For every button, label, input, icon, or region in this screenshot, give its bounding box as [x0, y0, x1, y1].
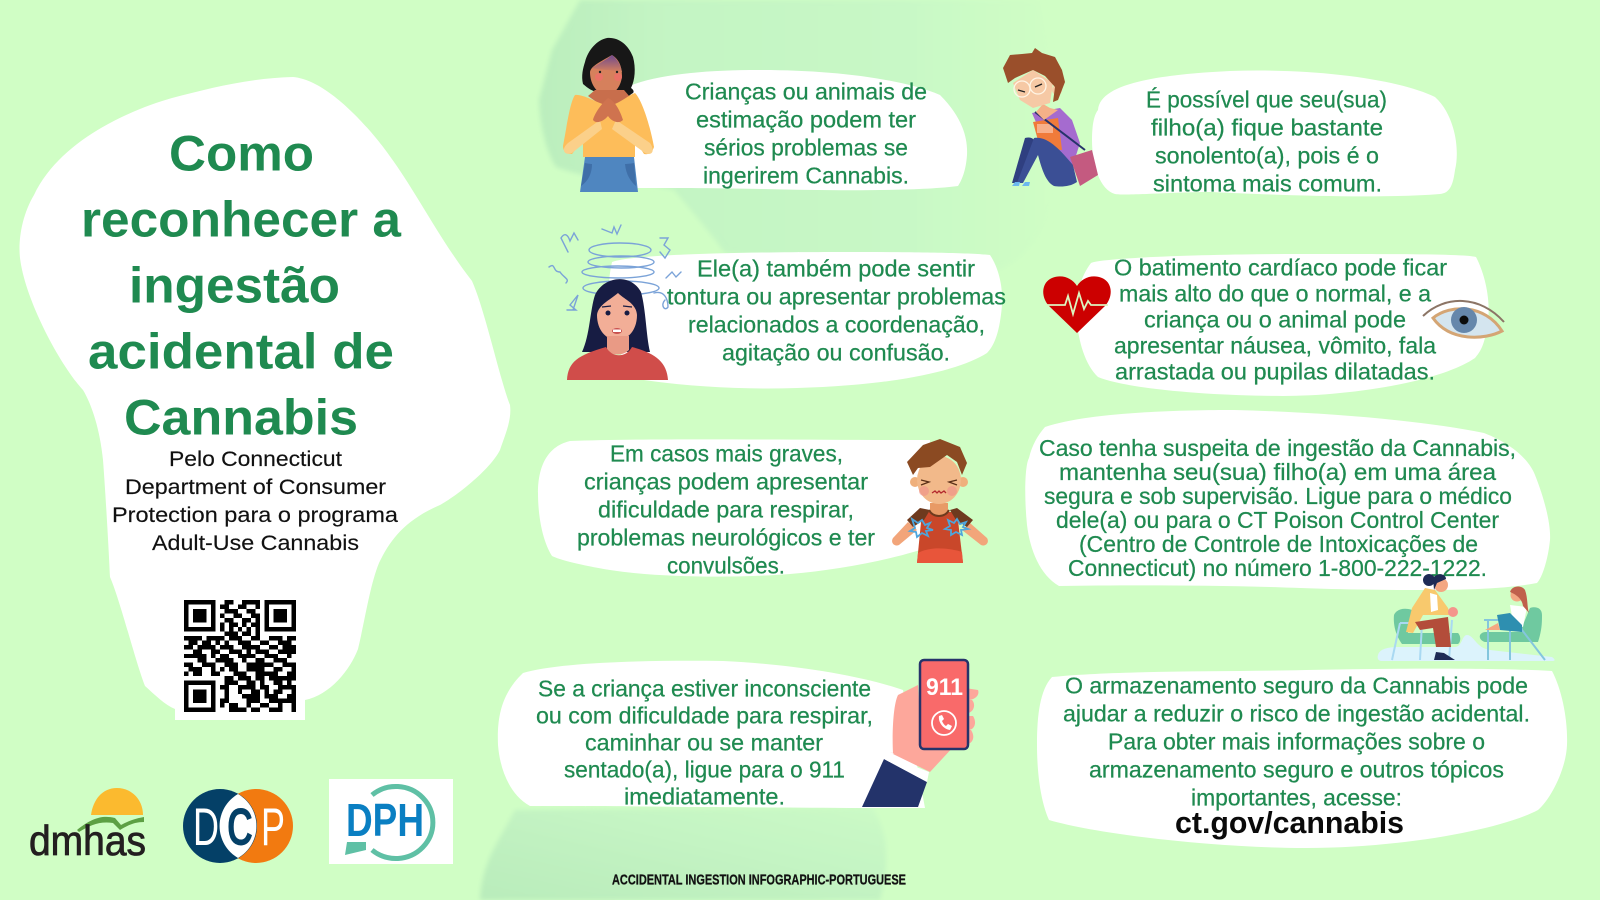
text: filho(a) fique bastante: [1151, 114, 1383, 140]
text: sérios problemas se: [704, 134, 908, 160]
text: importantes, acesse:: [1191, 784, 1402, 810]
panel: pets and children warning: [563, 38, 967, 192]
text: [1039, 435, 1516, 581]
icon: dizzy woman: [549, 225, 681, 380]
subtitle: Department of Consumer: [125, 476, 386, 499]
logo: DCP: C: [227, 798, 253, 857]
icon: hand holding phone: [862, 660, 978, 807]
icon: heart with pulse: [1043, 276, 1111, 333]
text: Em casos mais graves,: [610, 440, 843, 466]
logo: DPH: [329, 779, 453, 864]
text: ou com dificuldade para respirar,: [536, 702, 873, 728]
text: convulsões.: [667, 552, 785, 578]
bubble: [1037, 669, 1567, 848]
panel: title blob: [20, 77, 510, 720]
text: Connecticut) no número 1-800-222-1222.: [1068, 555, 1487, 581]
watercolor wash: [480, 0, 1060, 900]
icon: hand holding phone: 911: [926, 674, 963, 701]
panel: heart rate and symptoms: [1043, 254, 1504, 396]
logo: dmhas: dmhas: [29, 817, 146, 864]
text: sonolento(a), pois é o: [1155, 142, 1379, 168]
logo: DPH: DPH: [346, 794, 424, 846]
text: [1063, 672, 1530, 810]
swirl lines: [549, 225, 681, 310]
text: Ele(a) também pode sentir: [697, 255, 975, 281]
text: mantenha seu(sua) filho(a) em uma área: [1059, 459, 1497, 485]
text: mais alto do que o normal, e a: [1119, 280, 1432, 306]
title: [81, 126, 402, 446]
text: [536, 675, 873, 809]
title: reconhecer a: [81, 192, 402, 248]
blob shape: [20, 77, 510, 720]
icon: eye: [1423, 301, 1504, 337]
subtitle: Adult-Use Cannabis: [152, 532, 359, 555]
logo: dmhas: [29, 788, 146, 864]
panel: call 911: [498, 660, 978, 809]
text: Para obter mais informações sobre o: [1108, 728, 1485, 754]
text: imediatamente.: [624, 783, 785, 809]
text: caminhar ou se manter: [585, 729, 823, 755]
QR code: [184, 602, 296, 710]
text: sintoma mais comum.: [1153, 170, 1382, 196]
text: É possível que seu(sua): [1146, 86, 1387, 112]
subtitle: Protection para o programa: [112, 504, 398, 527]
title: ingestão: [129, 258, 340, 314]
text: tontura ou apresentar problemas: [667, 283, 1006, 309]
text: segura e sob supervisão. Ligue para o médico: [1044, 483, 1512, 509]
text: armazenamento seguro e outros tópicos: [1089, 756, 1504, 782]
icon: worried woman: [563, 38, 654, 192]
text: arrastada ou pupilas dilatadas.: [1115, 358, 1435, 384]
panel: severe cases: [538, 439, 988, 578]
panel: suspicion, call poison control: [1025, 410, 1550, 590]
subtitle: [112, 448, 398, 555]
icon: woman and child seated: [1378, 574, 1555, 661]
bubble: [1092, 71, 1457, 196]
text: [1146, 86, 1387, 196]
text: O batimento cardíaco pode ficar: [1114, 254, 1447, 280]
text: dificuldade para respirar,: [598, 496, 854, 522]
text: ajudar a reduzir o risco de ingestão acidental.: [1063, 700, 1530, 726]
text: [1114, 254, 1447, 384]
bubble: [609, 252, 1002, 389]
panel: drowsiness: [1003, 48, 1457, 196]
text: dele(a) ou para o CT Poison Control Center: [1056, 507, 1499, 533]
panel: safe storage: [1037, 669, 1567, 848]
text: criança ou o animal pode: [1144, 306, 1406, 332]
logo: DCP: [183, 789, 293, 863]
bubble: [1077, 254, 1489, 396]
bubble: [498, 661, 925, 808]
footer label: ACCIDENTAL INGESTION INFOGRAPHIC-PORTUGUESE: [612, 872, 906, 888]
bubble: [620, 70, 967, 190]
subtitle: Pelo Connecticut: [169, 448, 342, 471]
text: Se a criança estiver inconsciente: [538, 675, 871, 701]
icon: boy in pain: [892, 439, 988, 563]
bubble: [1025, 410, 1550, 590]
panel: dizziness: [549, 225, 1006, 389]
text: O armazenamento seguro da Cannabis pode: [1065, 672, 1528, 698]
text: ingerirem Cannabis.: [703, 162, 909, 188]
title: Como: [169, 126, 314, 182]
text: [685, 78, 927, 188]
logo: DCP: P: [261, 798, 285, 857]
logo: DCP: D: [193, 798, 219, 857]
link: ct.gov/cannabis: [1175, 805, 1404, 840]
text: crianças podem apresentar: [584, 468, 868, 494]
icon: sleepy boy: [1003, 48, 1098, 187]
title: Cannabis: [124, 390, 358, 446]
text: (Centro de Controle de Intoxicações de: [1079, 531, 1478, 557]
text: problemas neurológicos e ter: [577, 524, 875, 550]
text: apresentar náusea, vômito, fala: [1114, 332, 1437, 358]
bubble: [538, 439, 935, 577]
text: Caso tenha suspeita de ingestão da Cannabis,: [1039, 435, 1516, 461]
title: acidental de: [88, 324, 394, 380]
text: relacionados a coordenação,: [688, 311, 985, 337]
text: [577, 440, 875, 578]
text: sentado(a), ligue para o 911: [564, 756, 845, 782]
text: agitação ou confusão.: [722, 339, 950, 365]
text: Crianças ou animais de: [685, 78, 927, 104]
text: [667, 255, 1006, 365]
text: estimação podem ter: [696, 106, 916, 132]
